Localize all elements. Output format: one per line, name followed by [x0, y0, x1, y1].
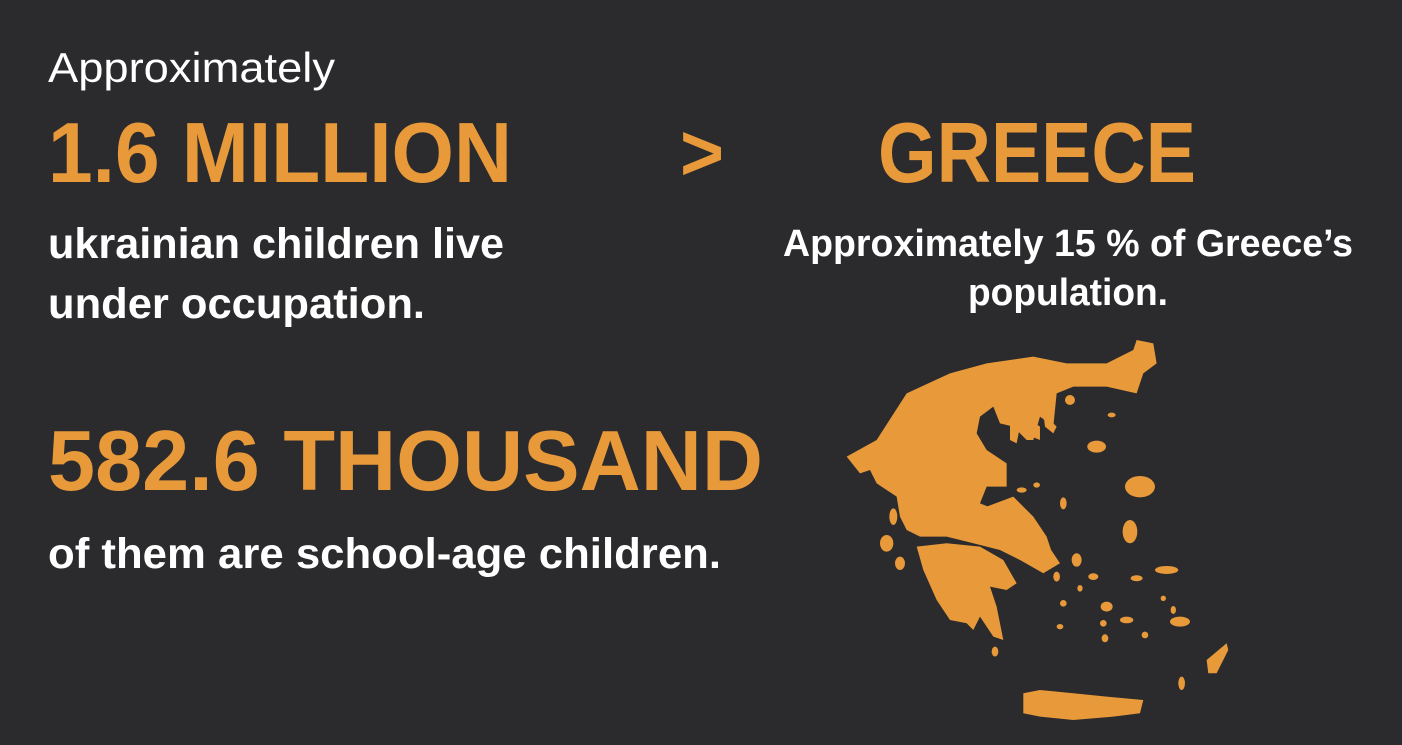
map: Greece — [847, 340, 1228, 720]
text block: children under occupation: under occupation. — [48, 280, 425, 328]
text block: children under occupation — [48, 220, 504, 328]
text block: children under occupation: ukrainian children live — [48, 220, 504, 268]
comparison symbol: > — [680, 108, 724, 197]
text block: school-age: of them are school-age children. — [48, 530, 721, 578]
headline: 1.6 million: 1.6 MILLION — [48, 106, 512, 201]
text block: Greece population: Approximately 15 % of Greece’s — [783, 223, 1353, 265]
intro label: Approximately — [48, 44, 335, 91]
text block: Greece population: population. — [968, 272, 1168, 314]
headline: 582.6 thousand: 582.6 THOUSAND — [48, 414, 763, 509]
text block: Greece population — [783, 223, 1353, 314]
headline: Greece: GREECE — [878, 106, 1196, 201]
